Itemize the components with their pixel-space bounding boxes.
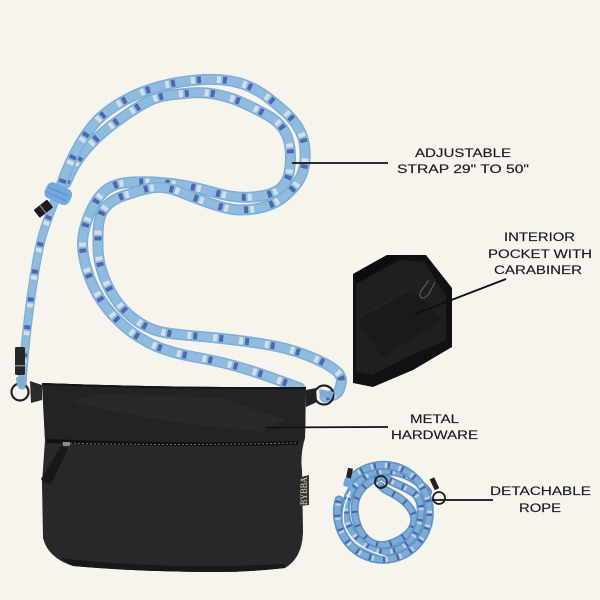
label: metal hardware: HARDWARE (391, 430, 478, 442)
label: detachable rope (490, 486, 591, 515)
label: adjustable strap: ADJUSTABLE (415, 148, 511, 160)
callout line: strap (292, 162, 388, 164)
label: adjustable strap (397, 148, 529, 176)
label: metal hardware (391, 414, 478, 442)
left metal ring and cap (12, 347, 42, 403)
label: interior pocket: CARABINER (494, 265, 582, 277)
zipper pull (41, 446, 68, 484)
label: metal hardware: METAL (410, 414, 460, 426)
label: interior pocket (488, 232, 592, 277)
coil rings and caps (343, 468, 445, 504)
detachable rope coil (337, 465, 445, 559)
adjustable rope strap (22, 79, 341, 397)
panel: interior pocket (353, 255, 452, 387)
label: interior pocket: POCKET WITH (488, 249, 592, 261)
coil white gap (343, 492, 385, 556)
zipper (47, 441, 298, 444)
callout line: interior pocket (415, 279, 506, 314)
label: detachable rope: ROPE (519, 503, 561, 515)
label: detachable rope: DETACHABLE (490, 486, 591, 498)
bag flap (42, 383, 306, 442)
right metal ring (306, 386, 334, 407)
bag body (42, 383, 306, 572)
callout line: metal hardware (265, 426, 388, 428)
strap knot and end cap (34, 180, 74, 218)
pocket lining (353, 255, 452, 387)
label: adjustable strap: STRAP 29" TO 50" (397, 164, 529, 176)
carabiner (420, 280, 435, 298)
callout line: detachable rope (432, 499, 493, 501)
bag (41, 383, 309, 572)
bag shadow (60, 558, 285, 572)
bybba tag: BYBBA (299, 477, 309, 505)
inner pocket (357, 290, 443, 357)
label: interior pocket: INTERIOR (504, 232, 575, 244)
